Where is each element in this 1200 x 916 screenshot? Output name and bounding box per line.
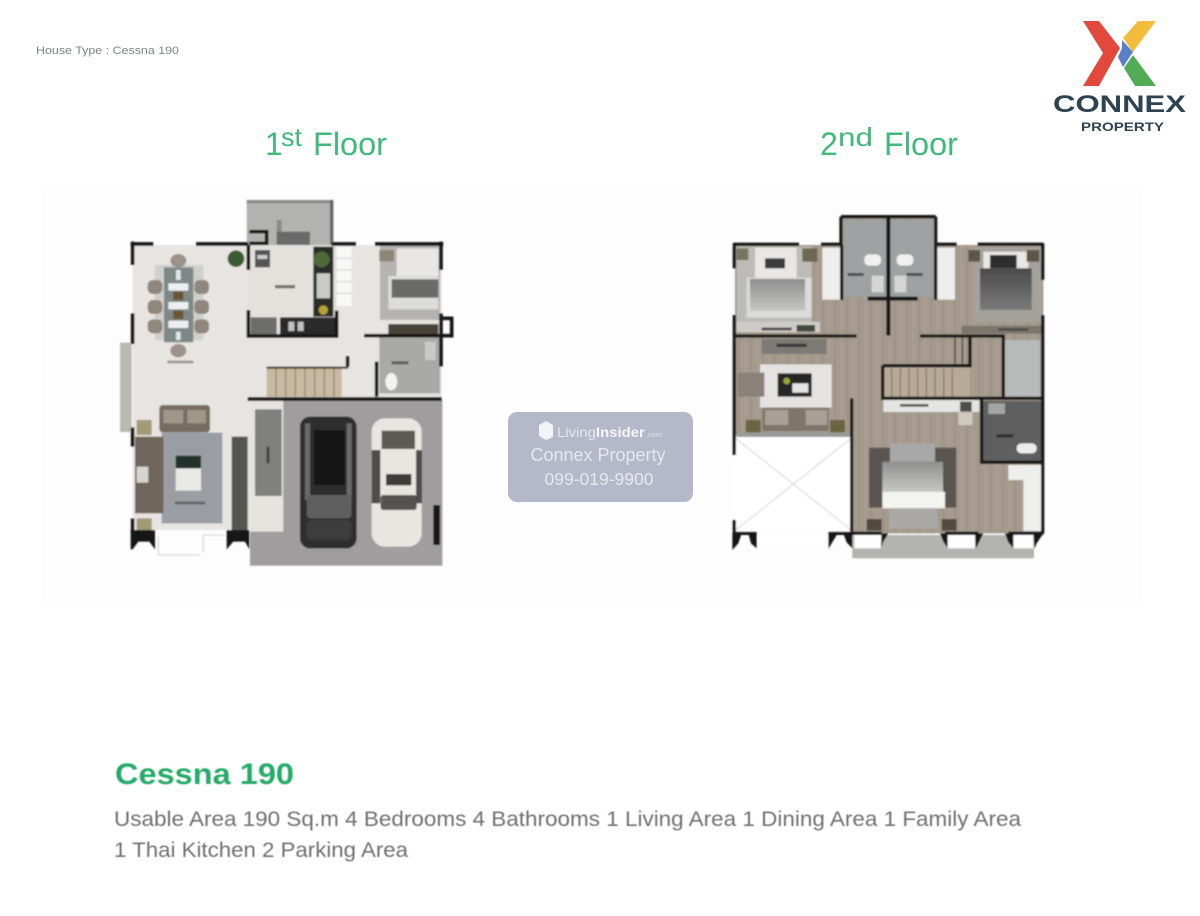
- front balcony: [852, 533, 1034, 558]
- watermark badge: [508, 412, 693, 502]
- side window ledge: [120, 343, 132, 432]
- watermark icon: [539, 421, 553, 440]
- logo: Connex Property: [1053, 21, 1186, 134]
- dining set: [148, 254, 209, 363]
- white car: [372, 418, 422, 547]
- master bathroom: [983, 401, 1042, 462]
- balcony storage: [1005, 340, 1040, 397]
- logo subtitle: PROPERTY: [1081, 120, 1164, 134]
- black suv: [300, 417, 357, 548]
- floor plan: 2nd floor: [732, 217, 1043, 558]
- watermark phone: 099-019-9900: [545, 469, 654, 489]
- heading: 1st Floor: [265, 122, 387, 162]
- floor slab: [133, 245, 442, 530]
- kitchen: [248, 245, 337, 336]
- background image tint: [42, 185, 1142, 605]
- door bay: [158, 535, 223, 555]
- bedroom left: [737, 247, 820, 332]
- project title: Cessna 190: [115, 758, 294, 791]
- heading: 2nd Floor: [820, 122, 958, 162]
- living room: [135, 405, 222, 530]
- bedroom: [379, 245, 440, 336]
- balcony posts: [732, 533, 1043, 550]
- stairs: [267, 367, 348, 397]
- house type label: House Type : Cessna 190: [36, 45, 179, 57]
- heading: 2nd Floor: Floor: [884, 126, 958, 162]
- interior stair to the right of the kitchen: [337, 247, 352, 306]
- family area: [737, 339, 850, 437]
- walls: [131, 232, 452, 545]
- heading: 1st Floor: Floor: [313, 126, 387, 162]
- master bed: [867, 443, 957, 531]
- logo mark: [1083, 21, 1156, 86]
- rear terrace: [247, 200, 333, 245]
- bedroom right: [962, 247, 1042, 334]
- twin bathrooms: [843, 220, 933, 297]
- description line 1: Usable Area 190 Sq.m 4 Bedrooms 4 Bathrooms 1 Living Area 1 Dining Area 1 Family Area: [114, 808, 1021, 831]
- void above carport: [735, 437, 852, 548]
- watermark brand: LivingInsider .com: [557, 424, 662, 440]
- bathroom: [379, 337, 440, 393]
- master stair wardrobe: [1008, 465, 1041, 531]
- master wardrobe counter: [883, 400, 979, 425]
- watermark name: Connex Property: [530, 445, 666, 465]
- wardrobes: [822, 248, 955, 300]
- staircase: [883, 337, 970, 397]
- description: [114, 808, 1021, 862]
- heading: 2nd Floor: 2: [820, 126, 838, 162]
- logo wordmark: CONNEX: [1053, 91, 1186, 118]
- heading: 1st Floor: 1: [265, 126, 283, 162]
- carport: [232, 400, 442, 566]
- walls: [733, 217, 1043, 538]
- wood floor: [735, 217, 1043, 533]
- description line 2: 1 Thai Kitchen 2 Parking Area: [114, 839, 408, 862]
- plant: [228, 250, 244, 267]
- heading: 1st Floor: st: [281, 122, 303, 152]
- floor plan: 1st floor: [120, 200, 452, 566]
- heading: 2nd Floor: nd: [838, 122, 873, 152]
- entrance posts: [131, 530, 249, 549]
